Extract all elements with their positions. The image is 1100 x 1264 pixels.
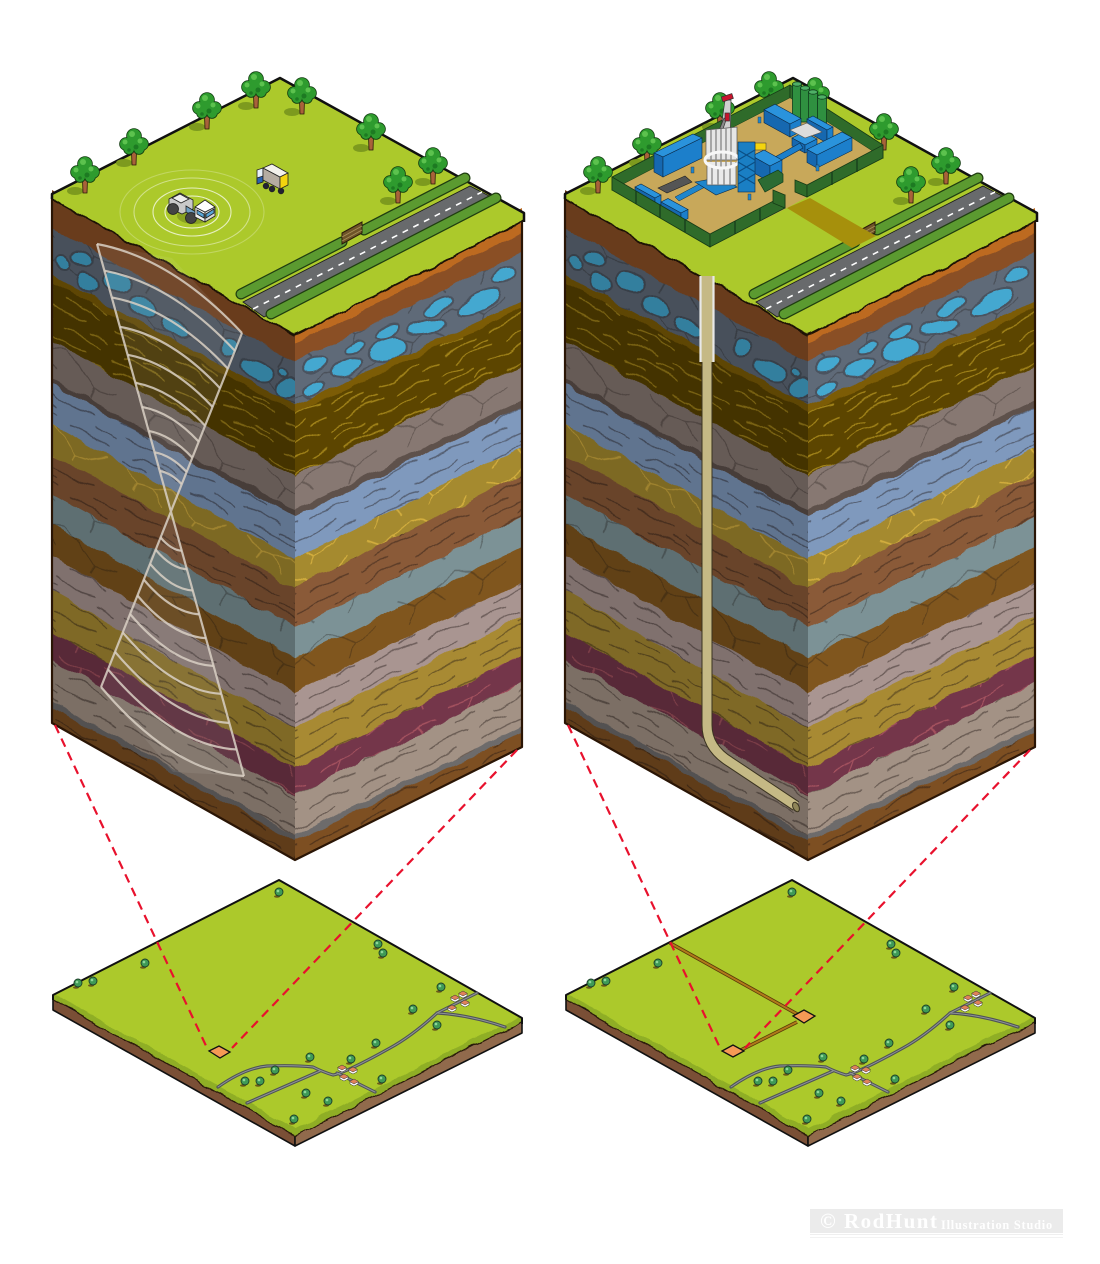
stratum: dark shale — [285, 297, 532, 870]
stratum: water-bearing rock — [295, 252, 1034, 404]
stratum: mustard — [42, 586, 305, 870]
shared block surface and strata (right copy) — [553, 60, 1048, 880]
blue containers — [635, 104, 852, 222]
stratum: tan-brown — [285, 542, 532, 870]
green silos — [792, 82, 826, 129]
stratum: beige — [285, 678, 532, 870]
vibroseis truck — [168, 193, 215, 224]
stratum: topsoil — [52, 190, 808, 362]
access track — [787, 198, 876, 248]
stratum: ochre limestone — [42, 419, 305, 870]
panel: seismic survey block (left) — [40, 60, 535, 880]
drilling mast — [711, 94, 733, 150]
red dashed projection lines (right) — [568, 725, 1030, 1050]
stratum: slate teal — [285, 512, 532, 870]
shared block: geological strata and surface — [40, 60, 535, 880]
tile soil base — [53, 998, 522, 1146]
right face strata — [285, 200, 532, 880]
road with dashed centre line — [243, 186, 493, 317]
green generator — [758, 170, 783, 192]
red dashed projection lines (left) — [55, 725, 517, 1050]
watermark — [810, 1209, 1063, 1238]
walkway — [675, 182, 707, 201]
tile roads — [218, 993, 505, 1103]
panel: drilling site block (right) — [553, 60, 1048, 880]
tile small trees — [73, 888, 445, 1125]
panel: location map tile (left) — [40, 860, 535, 1146]
grass surface — [40, 60, 535, 336]
back fence — [612, 85, 883, 190]
stratum: maroon — [285, 650, 532, 870]
watermark: © RodHunt — [820, 1209, 938, 1233]
surface trees — [67, 72, 447, 205]
site markers on right map — [722, 1010, 815, 1057]
recording truck — [257, 164, 288, 194]
horizontal well route on right map — [670, 943, 797, 1050]
stratum: basal brown — [42, 696, 305, 880]
stratum: pale mauve — [42, 552, 305, 870]
left face strata — [42, 180, 305, 880]
stratum: basal brown — [285, 722, 532, 880]
site marker on left map — [209, 1046, 230, 1058]
tile grass — [40, 860, 535, 1136]
stratum: grey mudstone — [42, 336, 305, 870]
stratum: blue sandstone — [42, 374, 305, 870]
grass top outline — [52, 78, 524, 222]
well bore with casing — [700, 276, 801, 813]
yellow machine — [755, 143, 766, 150]
rig base — [695, 177, 737, 195]
stratum: dark shale — [42, 269, 305, 870]
stratum: slate teal — [42, 489, 305, 870]
stratum: beige — [42, 654, 305, 870]
field gate — [342, 222, 362, 244]
ground mat — [658, 176, 692, 193]
blue lattice tower — [738, 142, 755, 192]
tile top outline — [53, 880, 522, 1024]
stratum: maroon — [42, 626, 305, 870]
stratum: ochre limestone — [285, 442, 532, 870]
stratum: brown siltstone — [42, 449, 305, 870]
block base outline — [52, 197, 522, 860]
stratum: grey mudstone — [295, 367, 1034, 510]
canopy — [790, 123, 822, 138]
seismic vibration rings — [120, 170, 264, 254]
drilling site compound — [612, 82, 883, 248]
stratum: tan-brown — [42, 519, 305, 870]
stratum: mustard — [285, 611, 532, 870]
stratum: brown siltstone — [285, 470, 532, 870]
stratum: pale mauve — [285, 577, 532, 870]
hedges along road — [241, 178, 496, 314]
tile village houses — [338, 991, 470, 1086]
front fence — [612, 145, 883, 247]
watermark: Illustration Studio — [941, 1218, 1053, 1232]
stratum: water-bearing rock — [53, 229, 808, 404]
seismic wave fan — [97, 244, 244, 776]
stratum: blue sandstone — [285, 396, 532, 870]
stratum: topsoil — [295, 208, 1035, 344]
site workers — [691, 117, 819, 200]
panel: location map tile (right) — [553, 860, 1048, 1146]
sand pad — [612, 98, 883, 247]
white rig tower — [705, 127, 739, 185]
